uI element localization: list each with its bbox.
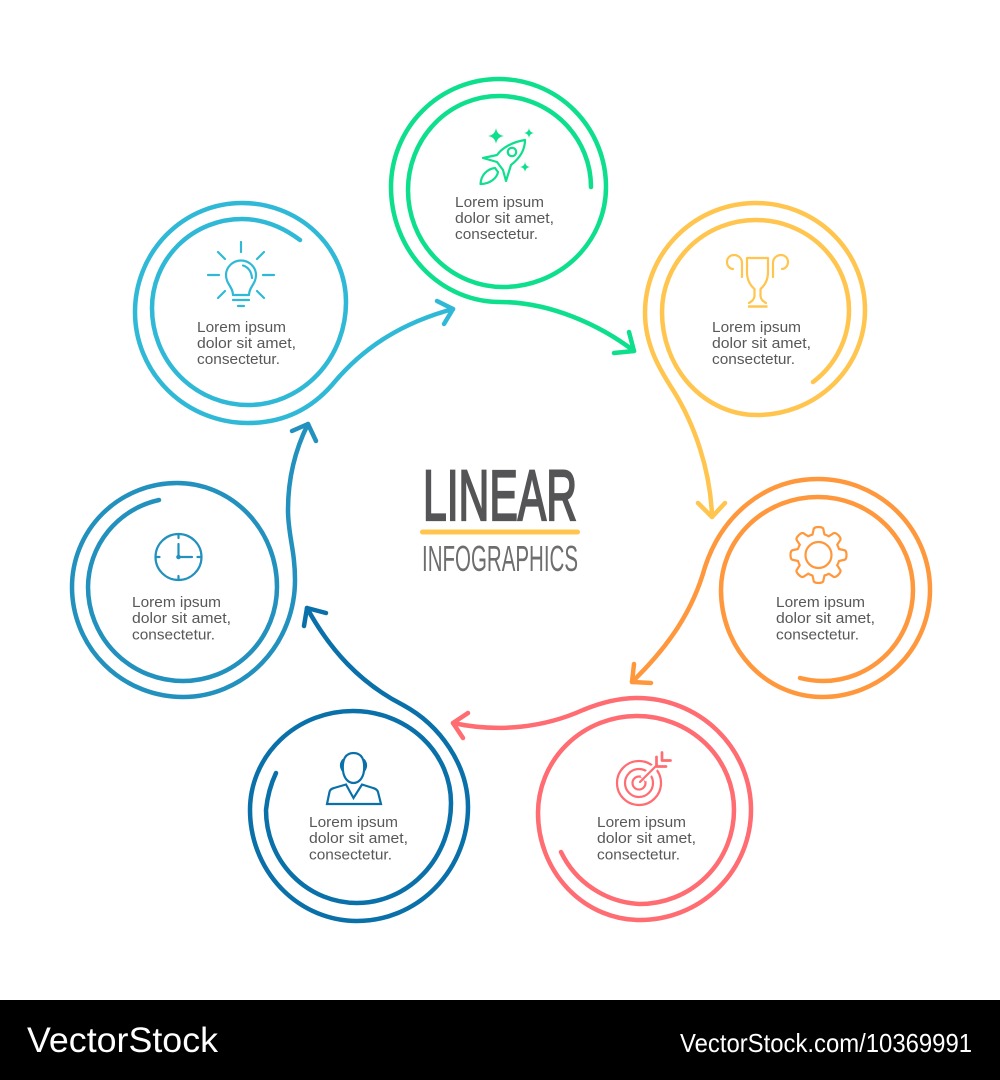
text: step 7: dolor sit amet, (197, 336, 296, 352)
text: step 7 (197, 320, 296, 368)
text: step 7: consectetur. (197, 352, 280, 368)
spiral arrow: blue (72, 424, 316, 697)
text: step 5 (309, 815, 408, 864)
footer url text: VectorStock.com/10369991 (680, 1028, 972, 1058)
text: step 3 (776, 595, 875, 644)
text: step 3: consectetur. (776, 628, 859, 644)
spiral arrow: orange (632, 479, 930, 697)
divider bar (420, 530, 580, 534)
text: step 5: consectetur. (309, 848, 392, 864)
heading: LINEAR: LINEAR (423, 457, 577, 536)
spiral arrow: dark blue (250, 608, 468, 921)
text: step 2: consectetur. (712, 352, 795, 368)
panel: step 1 green rocket (391, 79, 634, 353)
title block (420, 457, 580, 579)
spiral arrow: yellow (645, 203, 865, 517)
text: step 1 (455, 195, 554, 243)
icon: trophy (727, 255, 788, 306)
panel: step 4 coral target (453, 698, 751, 920)
icon: rocket (480, 128, 534, 184)
spiral arrow: green (391, 79, 634, 353)
text: step 6 (132, 595, 231, 644)
text: step 1: Lorem ipsum (455, 195, 544, 211)
panel: step 7 light blue bulb (135, 203, 453, 423)
text: step 2: dolor sit amet, (712, 336, 811, 352)
text: step 1: consectetur. (455, 227, 538, 243)
text: step 1: dolor sit amet, (455, 211, 554, 227)
icon: gear (790, 527, 846, 583)
footer bar (0, 1000, 1000, 1080)
text: step 3: Lorem ipsum (776, 595, 865, 611)
subheading: INFOGRAPHICS: INFOGRAPHICS (422, 538, 578, 579)
icon: clock (156, 534, 202, 580)
icon: light bulb (208, 242, 274, 306)
panel: step 2 yellow trophy (645, 203, 865, 517)
panel: step 3 orange gear (632, 479, 930, 697)
spiral arrow: coral (453, 698, 751, 920)
text: step 2 (712, 320, 811, 368)
text: step 6: dolor sit amet, (132, 611, 231, 627)
text: step 3: dolor sit amet, (776, 611, 875, 627)
text: step 6: Lorem ipsum (132, 595, 221, 611)
text: step 4 (597, 815, 696, 864)
spiral arrow: light blue (135, 203, 453, 423)
text: step 7: Lorem ipsum (197, 320, 286, 336)
footer logo text: VectorStock (27, 1021, 219, 1060)
text: step 4: dolor sit amet, (597, 831, 696, 847)
text: step 2: Lorem ipsum (712, 320, 801, 336)
text: step 4: Lorem ipsum (597, 815, 686, 831)
icon: person (327, 753, 381, 804)
panel: step 5 dark blue person (250, 608, 468, 921)
icon: target (617, 752, 670, 805)
text: step 4: consectetur. (597, 848, 680, 864)
text: step 5: Lorem ipsum (309, 815, 398, 831)
text: step 6: consectetur. (132, 628, 215, 644)
panel: step 6 blue clock (72, 424, 316, 697)
text: step 5: dolor sit amet, (309, 831, 408, 847)
